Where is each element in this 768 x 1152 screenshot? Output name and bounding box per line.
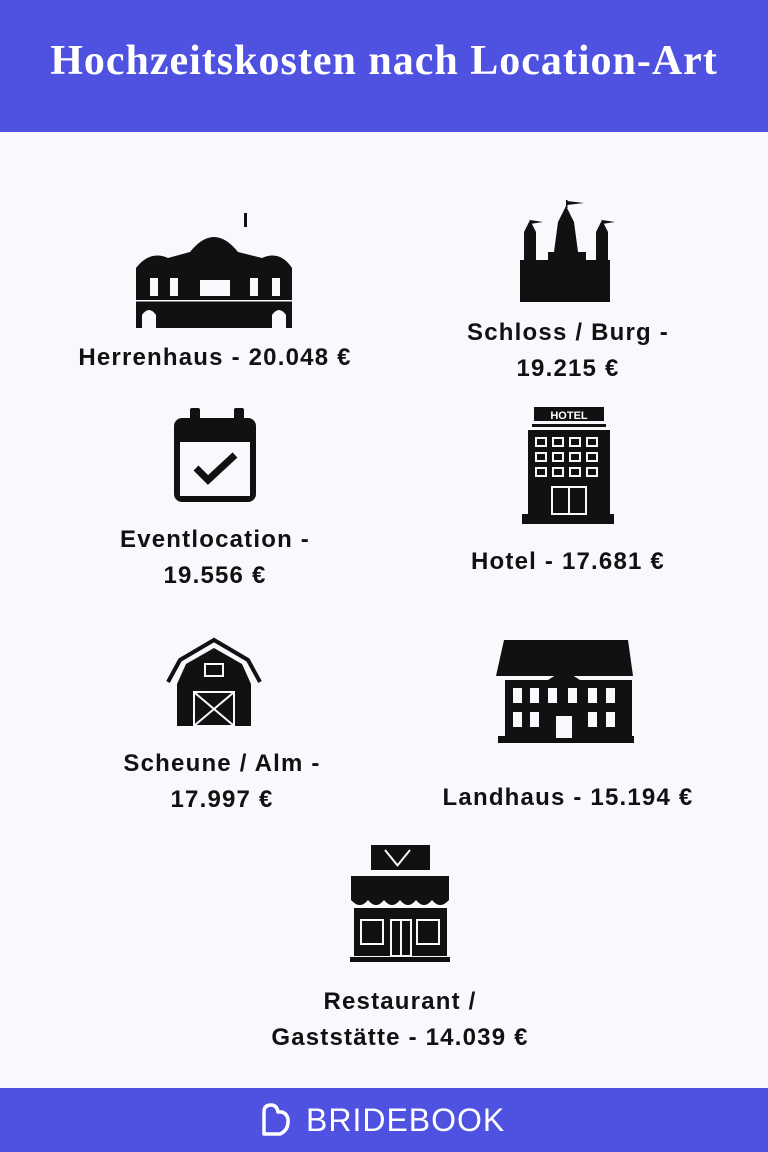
label: Landhaus: Landhaus - 15.194 €	[443, 784, 693, 811]
label: Restaurant: Gaststätte - 14.039 €	[271, 1024, 529, 1051]
label: Eventlocation: 19.556 €	[163, 562, 267, 589]
label: Scheune	[123, 750, 321, 813]
icon: calendar	[174, 408, 256, 502]
label: Eventlocation	[120, 526, 310, 589]
label: Scheune: Scheune / Alm -	[123, 750, 321, 777]
footer	[0, 1088, 768, 1152]
label: Eventlocation: Eventlocation -	[120, 526, 310, 553]
label: Restaurant: Restaurant /	[323, 988, 477, 1015]
icon: hotel: HOTEL	[550, 410, 588, 422]
icon: castle	[520, 200, 615, 302]
header	[0, 0, 768, 132]
icon: barn	[168, 640, 260, 726]
title: Hochzeitskosten nach Location-Art	[50, 38, 718, 84]
icon: hotel	[522, 407, 614, 524]
label: Schloss: 19.215 €	[516, 355, 620, 382]
icon: manor house	[136, 213, 292, 328]
label: Restaurant	[271, 988, 529, 1051]
label: Hotel: Hotel - 17.681 €	[471, 548, 665, 575]
label: Herrenhaus: Herrenhaus - 20.048 €	[78, 344, 352, 371]
icon: restaurant	[350, 845, 450, 962]
label: Schloss: Schloss / Burg -	[467, 319, 669, 346]
label: Scheune: 17.997 €	[170, 786, 274, 813]
logo: BRIDEBOOK	[306, 1102, 505, 1138]
label: Schloss	[467, 319, 669, 382]
icon: country house	[496, 640, 634, 743]
